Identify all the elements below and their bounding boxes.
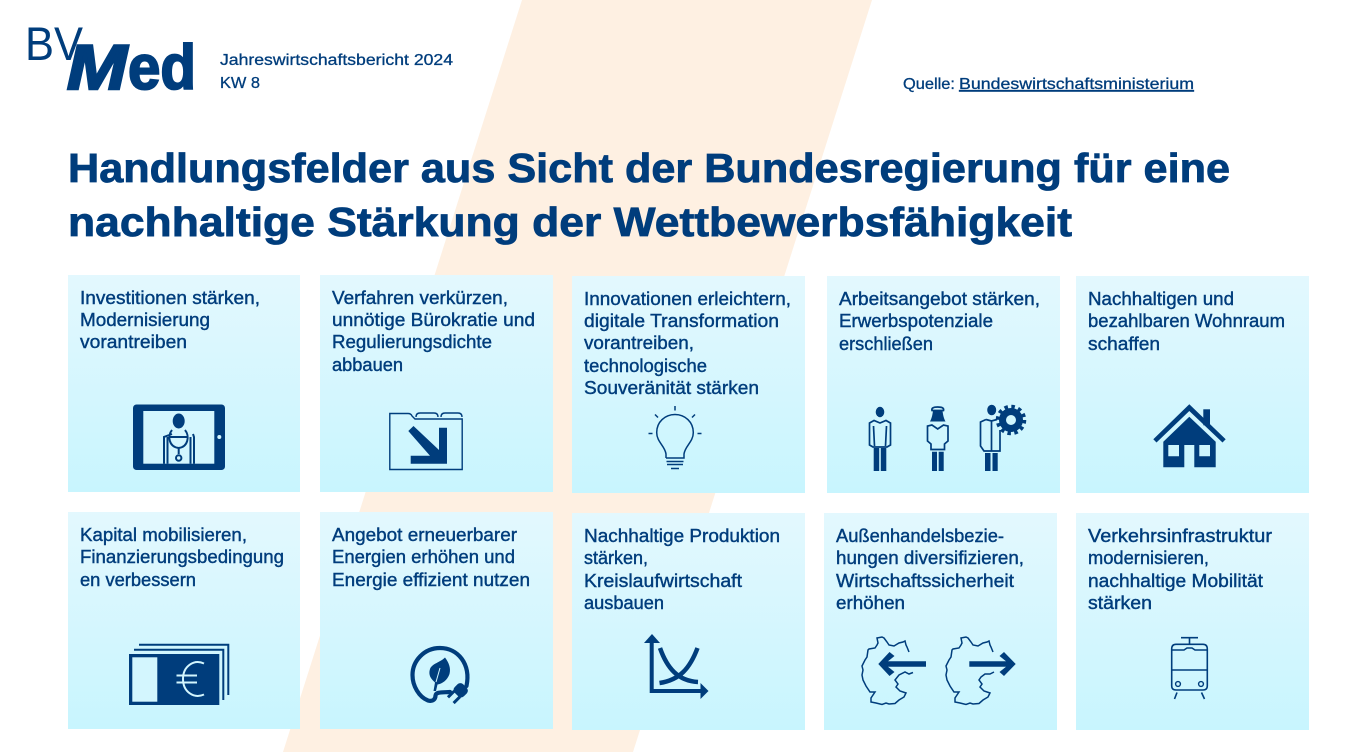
text: Energien: Energie effizient nutzen xyxy=(332,570,530,590)
text: Verfahren: Verfahren verkürzen, xyxy=(332,288,508,308)
text: Verkehrsinfrastruktur: Verkehrsinfrastruktur xyxy=(1088,526,1272,546)
text: Wohnraum: Nachhaltigen und xyxy=(1088,289,1234,309)
text: Verkehrsinfrastruktur: stärken xyxy=(1088,593,1152,613)
icon: light bulb xyxy=(648,406,702,468)
text: Verfahren: unnötige Bürokratie und xyxy=(332,310,535,330)
header text: report name xyxy=(220,52,453,92)
text: Arbeitsangebot xyxy=(839,289,1040,354)
panel: Verkehrsinfrastruktur xyxy=(1076,513,1309,730)
text: Innovationen: Innovationen erleichtern, xyxy=(584,289,791,309)
text: Arbeitsangebot: Erwerbspotenziale xyxy=(839,311,993,331)
text: Produktion: stärken, xyxy=(584,548,648,568)
text: Innovationen: technologische xyxy=(584,356,707,376)
source line: Quelle: xyxy=(903,76,955,93)
logo: BVMed: M xyxy=(67,33,129,103)
text: Energien: Energien erhöhen und xyxy=(332,547,515,567)
logo: BVMed xyxy=(25,17,196,103)
title: nachhaltige Stärkung der Wettbewerbsfähigkeit xyxy=(68,199,1072,245)
text: Verkehrsinfrastruktur xyxy=(1088,526,1272,613)
icon: tram xyxy=(1172,638,1207,699)
text: Investitionen: Modernisierung xyxy=(80,310,210,330)
panel: Innovationen xyxy=(572,276,805,493)
text: Investitionen xyxy=(80,288,260,352)
text: Außenhandel: Wirtschaftssicherheit xyxy=(836,571,1014,591)
text: Produktion: ausbauen xyxy=(584,593,664,613)
title: Handlungsfelder aus Sicht der Bundesregierung für eine xyxy=(68,145,1230,191)
text: Kapital xyxy=(80,525,284,590)
panel: Außenhandel xyxy=(824,513,1057,730)
icon: euro banknotes xyxy=(129,645,228,705)
text: Energien xyxy=(332,525,530,590)
text: Innovationen: digitale Transformation xyxy=(584,311,779,331)
text: Wohnraum xyxy=(1088,289,1285,354)
text: Außenhandel: Außenhandelsbezie- xyxy=(836,526,1004,546)
background diagonal band xyxy=(283,0,872,752)
panel: Arbeitsangebot xyxy=(827,276,1060,493)
icon: three workers xyxy=(870,405,1024,471)
text: Verkehrsinfrastruktur: modernisieren, xyxy=(1088,548,1209,568)
text: Investitionen: vorantreiben xyxy=(80,332,187,352)
panel: Wohnraum xyxy=(1076,276,1309,493)
text: Innovationen: vorantreiben, xyxy=(584,333,694,353)
icon: Germany maps with arrows xyxy=(862,637,1016,704)
header text: report name: Jahreswirtschaftsbericht 2024 xyxy=(220,52,453,69)
text: Außenhandel: erhöhen xyxy=(836,593,905,613)
text: Außenhandel xyxy=(836,526,1024,613)
text: Verfahren xyxy=(332,288,535,375)
icon: leaf with plug xyxy=(412,648,470,705)
text: Kapital: en verbessern xyxy=(80,570,196,590)
text: Wohnraum: schaffen xyxy=(1088,334,1160,354)
text: Produktion: Kreislaufwirtschaft xyxy=(584,571,742,591)
text: Innovationen xyxy=(584,289,791,398)
icon: tablet with doctor xyxy=(133,404,225,470)
icon: house xyxy=(1153,404,1226,467)
text: Produktion xyxy=(584,526,780,613)
text: Innovationen: Souveränität stärken xyxy=(584,378,759,398)
text: Produktion: Nachhaltige Produktion xyxy=(584,526,780,546)
panel: Energien xyxy=(320,512,553,729)
source line: Bundeswirtschaftsministerium xyxy=(959,76,1194,93)
text: Kapital: Kapital mobilisieren, xyxy=(80,525,247,545)
panel: Verfahren xyxy=(320,275,553,492)
text: Kapital: Finanzierungsbedingung xyxy=(80,547,284,567)
header text: report name: KW 8 xyxy=(220,75,260,92)
title xyxy=(68,145,1230,245)
text: Wohnraum: bezahlbaren Wohnraum xyxy=(1088,311,1285,331)
logo: BVMed: BV xyxy=(25,17,84,70)
text: Verkehrsinfrastruktur: nachhaltige Mobilität xyxy=(1088,571,1263,591)
panel: Investitionen xyxy=(68,275,300,492)
panel: Produktion xyxy=(572,513,805,730)
icon part: plug xyxy=(446,681,470,705)
text: Investitionen: Investitionen stärken, xyxy=(80,288,260,308)
text: Energien: Angebot erneuerbarer xyxy=(332,525,517,545)
panel: Kapital xyxy=(68,512,300,729)
text: Außenhandel: hungen diversifizieren, xyxy=(836,548,1024,568)
text: Arbeitsangebot: Arbeitsangebot stärken, xyxy=(839,289,1040,309)
text: Verfahren: Regulierungsdichte xyxy=(332,332,492,352)
icon: crossing curves chart xyxy=(644,634,708,699)
text: Arbeitsangebot: erschließen xyxy=(839,334,933,354)
icon: folder with arrow xyxy=(390,413,462,470)
logo: BVMed: ed xyxy=(128,33,196,103)
text: Verfahren: abbauen xyxy=(332,355,403,375)
